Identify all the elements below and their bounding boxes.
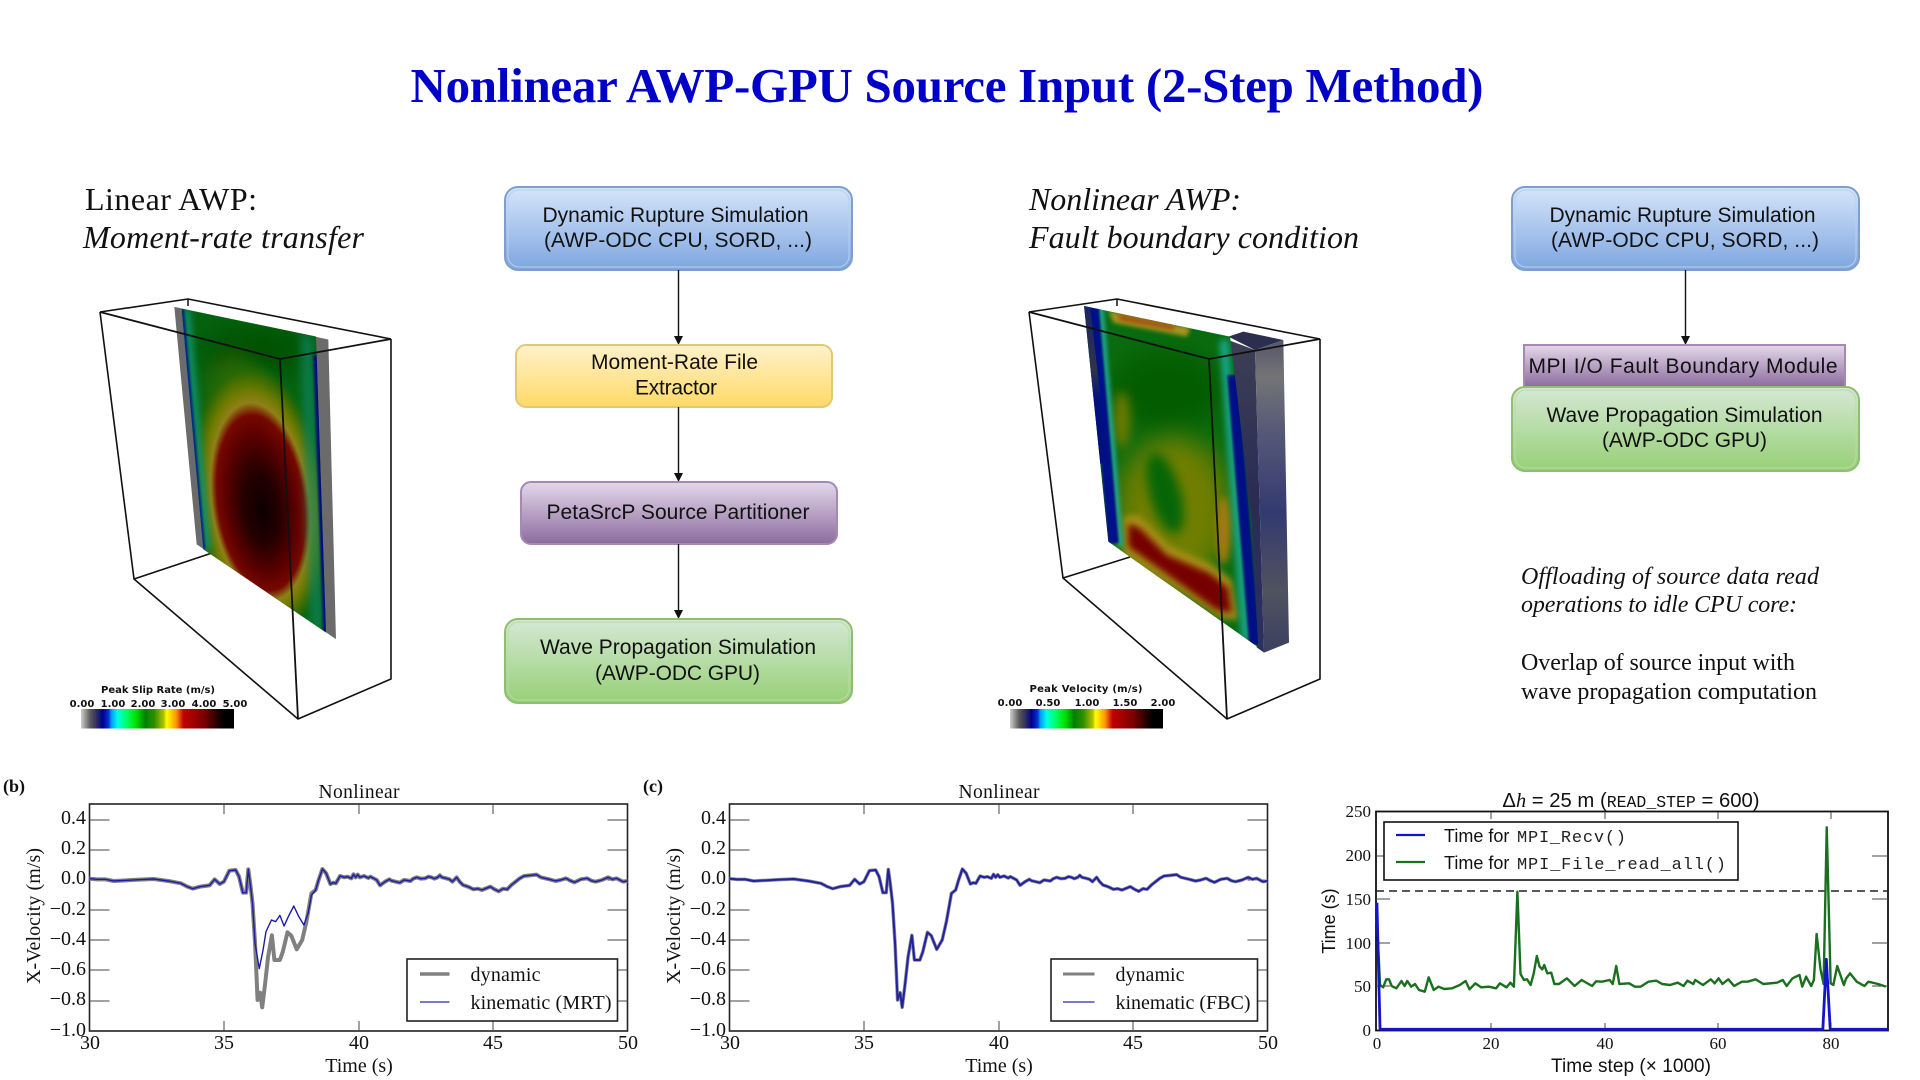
node: moment-rate file extractor: Extractor (635, 376, 717, 400)
legend (c): kinematic (FBC) (1116, 992, 1250, 1014)
node: dynamic rupture simulation (1512, 187, 1859, 270)
panel: nonlinear AWP 3D fault visualization (998, 299, 1320, 728)
color bar: peak velocity: 2.00 (1151, 698, 1175, 709)
chart (b): MRT velocity time series: 40 (349, 1032, 369, 1054)
arrow: rupture to fault boundary module (1681, 270, 1690, 345)
volume side faces (1228, 332, 1289, 653)
chart: source read timing (1319, 790, 1888, 1077)
color bar: peak velocity: 1.00 (1075, 698, 1099, 709)
chart: source read timing: 60 (1710, 1034, 1726, 1053)
text block: offloading note: operations to idle CPU core: (1521, 592, 1797, 618)
panel: linear AWP heading: Moment-rate transfer (82, 219, 365, 255)
color bar: peak slip rate: Peak Slip Rate (m/s) (101, 685, 215, 696)
chart (c): FBC velocity time series: −0.2 (690, 898, 726, 920)
fault volume: peak velocity map (1080, 300, 1289, 653)
panel: nonlinear AWP heading (1028, 181, 1359, 255)
arrow: rupture to extractor (674, 270, 683, 345)
node: wave propagation simulation: Wave Propagation Simulation (540, 636, 816, 659)
node: wave propagation simulation (1512, 387, 1859, 471)
color bar: peak slip rate: 0.00 (70, 699, 94, 710)
node: dynamic rupture simulation: Dynamic Rupture Simulation (1550, 204, 1816, 227)
chart (c): FBC velocity time series: Nonlinear (958, 782, 1040, 803)
legend: MPI timing: Time for (1444, 826, 1509, 846)
flowchart: linear AWP pipeline (505, 187, 852, 703)
text block: offloading note: Offloading of source data read (1521, 564, 1820, 590)
chart (b): MRT velocity time series: 30 (80, 1032, 100, 1054)
color bar: peak slip rate: 4.00 (192, 699, 216, 710)
chart: source read timing: Time step (× 1000) (1551, 1056, 1711, 1077)
chart: source read timing: 0 (1373, 1034, 1381, 1053)
chart: source read timing: 80 (1822, 1034, 1840, 1053)
chart (b): MRT velocity time series: −1.0 (50, 1019, 86, 1041)
node: MPI I/O fault boundary module: MPI I/O Fault Boundary Module (1528, 355, 1838, 378)
title: Nonlinear AWP-GPU Source Input (2-Step Method) (410, 58, 1484, 113)
chart (b): MRT velocity time series: −0.4 (50, 928, 86, 950)
color bar: peak slip rate: 2.00 (131, 699, 155, 710)
node: wave propagation simulation: Wave Propagation Simulation (1546, 404, 1822, 427)
node: wave propagation simulation: (AWP-ODC GPU) (595, 662, 760, 685)
chart: source read timing: 20 (1482, 1034, 1500, 1053)
fault plate: moment-rate slip map (174, 306, 336, 639)
chart (c): FBC velocity time series: 45 (1123, 1032, 1143, 1054)
chart: source read timing: 200 (1346, 846, 1371, 865)
chart: source read timing: 50 (1354, 977, 1371, 996)
node: moment-rate file extractor (516, 345, 832, 407)
chart (b): MRT velocity time series: (b) (3, 776, 25, 797)
chart (c): FBC velocity time series: 0.2 (701, 837, 726, 859)
arrow: extractor to partitioner (674, 407, 683, 482)
chart (c): FBC velocity time series: X-Velocity (m/s) (663, 848, 685, 984)
node: moment-rate file extractor: Moment-Rate File (591, 351, 758, 374)
text block: offloading note: wave propagation computation (1521, 679, 1817, 705)
chart: source read timing: 100 (1346, 934, 1371, 953)
chart: source read timing: Δh = 25 m (READ_STEP = 600) (1502, 790, 1760, 812)
color bar: peak slip rate: 5.00 (223, 699, 247, 710)
chart (c): FBC velocity time series: −1.0 (690, 1019, 726, 1041)
panel: linear AWP heading: Linear AWP: (85, 181, 257, 217)
chart (c): FBC velocity time series (643, 776, 1278, 1077)
node: wave propagation simulation (505, 619, 852, 703)
chart (b): MRT velocity time series: 0.0 (61, 867, 86, 889)
node: wave propagation simulation: (AWP-ODC GPU) (1602, 429, 1767, 452)
chart (c): FBC velocity time series: 50 (1258, 1032, 1278, 1054)
chart (c): FBC velocity time series: (c) (643, 776, 663, 797)
chart (c): FBC velocity time series: −0.8 (690, 988, 726, 1010)
chart (b): MRT velocity time series: 0.4 (61, 807, 86, 829)
node: MPI I/O fault boundary module (1524, 345, 1845, 387)
node: dynamic rupture simulation: (AWP-ODC CPU, SORD, ...) (544, 229, 812, 252)
chart (b): MRT velocity time series: 45 (483, 1032, 503, 1054)
chart: source read timing: Time (s) (1319, 888, 1339, 954)
legend (b): dynamic (470, 964, 541, 986)
chart (c): FBC velocity time series: 35 (854, 1032, 874, 1054)
arrow: partitioner to wave propagation (674, 544, 683, 619)
chart (b): MRT velocity time series: Nonlinear (318, 782, 400, 803)
color bar: peak slip rate: 1.00 (101, 699, 125, 710)
color bar: peak slip rate (70, 685, 247, 728)
node: dynamic rupture simulation (505, 187, 852, 270)
color bar: peak velocity: Peak Velocity (m/s) (1030, 684, 1142, 695)
chart (b): MRT velocity time series: −0.8 (50, 988, 86, 1010)
legend (b): kinematic (MRT) (470, 992, 612, 1014)
color bar: peak velocity: 1.50 (1113, 698, 1137, 709)
panel: linear AWP heading (82, 181, 365, 255)
chart: source read timing: 150 (1346, 890, 1371, 909)
node: PetaSrcP source partitioner: PetaSrcP Source Partitioner (546, 501, 810, 524)
chart (c): FBC velocity time series: 0.0 (701, 867, 726, 889)
chart (b): MRT velocity time series: 0.2 (61, 837, 86, 859)
panel: nonlinear AWP heading: Nonlinear AWP: (1028, 181, 1241, 217)
chart (c): FBC velocity time series: 40 (989, 1032, 1009, 1054)
chart: source read timing: 40 (1596, 1034, 1614, 1053)
text block: offloading note (1521, 564, 1820, 705)
chart (b): MRT velocity time series: Time (s) (325, 1055, 393, 1077)
node: dynamic rupture simulation: (AWP-ODC CPU, SORD, ...) (1551, 229, 1819, 252)
panel: nonlinear AWP heading: Fault boundary condition (1028, 219, 1359, 255)
chart (c): FBC velocity time series: −0.6 (690, 958, 726, 980)
node: PetaSrcP source partitioner (521, 482, 837, 544)
chart (b): MRT velocity time series: X-Velocity (m/s) (23, 848, 45, 984)
flowchart: nonlinear AWP pipeline (1512, 187, 1859, 471)
chart (c): FBC velocity time series: Time (s) (965, 1055, 1033, 1077)
panel: linear AWP 3D fault visualization (70, 299, 391, 728)
legend (b) (407, 959, 618, 1021)
legend: MPI timing (1384, 822, 1738, 880)
chart: source read timing: 0 (1362, 1021, 1371, 1040)
chart: source read timing: 250 (1346, 802, 1371, 821)
chart (b): MRT velocity time series: 35 (214, 1032, 234, 1054)
node: dynamic rupture simulation: Dynamic Rupture Simulation (542, 204, 808, 227)
color bar: peak velocity (998, 684, 1175, 728)
chart (c): FBC velocity time series: 30 (720, 1032, 740, 1054)
legend: MPI timing: MPI_File_read_all() (1517, 856, 1726, 875)
legend: MPI timing: Time for (1444, 853, 1509, 873)
color bar: peak slip rate: 3.00 (161, 699, 185, 710)
text block: offloading note: Overlap of source input with (1521, 650, 1795, 676)
chart (c): FBC velocity time series: 0.4 (701, 807, 726, 829)
chart (b): MRT velocity time series (3, 776, 638, 1077)
legend (c): dynamic (1116, 964, 1185, 986)
color bar: peak velocity: 0.00 (998, 698, 1022, 709)
chart (b): MRT velocity time series: 50 (618, 1032, 638, 1054)
legend (c) (1051, 959, 1258, 1021)
chart (c): FBC velocity time series: −0.4 (690, 928, 726, 950)
legend: MPI timing: MPI_Recv() (1517, 829, 1626, 848)
chart (b): MRT velocity time series: −0.2 (50, 898, 86, 920)
color bar: peak velocity: 0.50 (1036, 698, 1060, 709)
chart (b): MRT velocity time series: −0.6 (50, 958, 86, 980)
